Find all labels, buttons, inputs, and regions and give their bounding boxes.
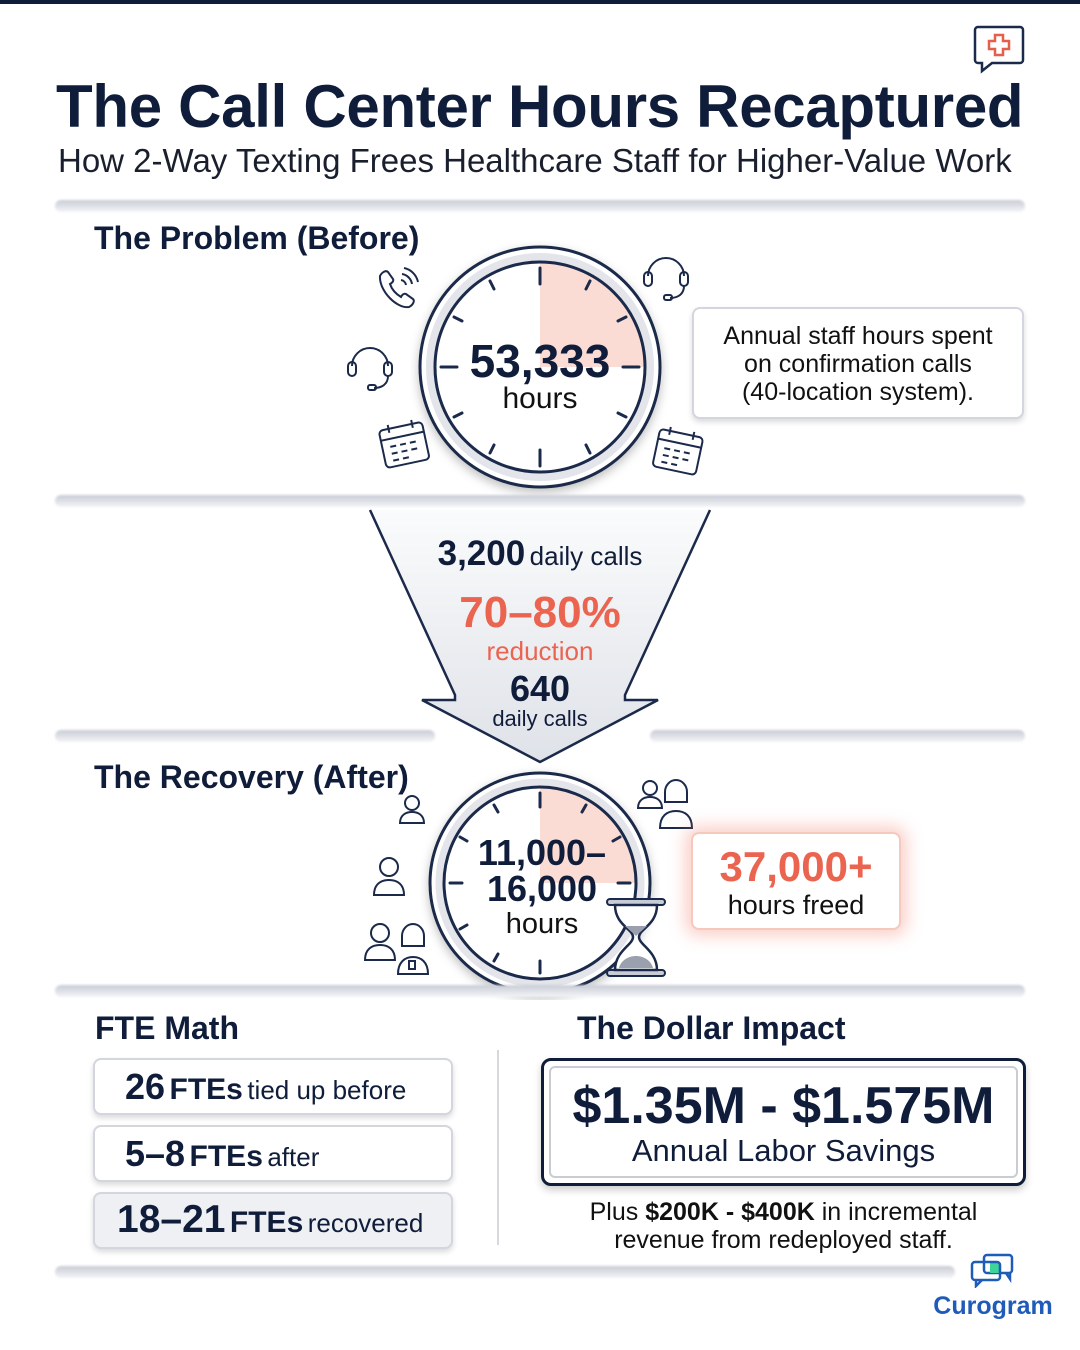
divider [497, 1050, 499, 1245]
clock: 53,333 hours: hours [502, 382, 578, 415]
icon: headset right [643, 257, 689, 301]
callout: 37,000+ hours freed: hours freed [728, 890, 864, 920]
text: incremental revenue [590, 1198, 977, 1254]
icon: calendar left [378, 420, 430, 468]
text: 640 daily calls: daily calls [492, 706, 588, 731]
text: 3,200 daily calls: 3,200 daily calls [438, 534, 642, 573]
text: 640 daily calls: 640 [510, 668, 570, 709]
clock: 53,333 hours: 53,333 [470, 335, 610, 387]
FTE row 2 [93, 1125, 453, 1182]
clock: 11,000-16,000 hours [423, 770, 657, 1000]
callout: 37,000+ hours freed: 37,000+ [720, 843, 872, 890]
clock: 11,000-16,000 hours: hours [506, 908, 578, 940]
savings box: Annual Labor Savings [632, 1133, 935, 1168]
clock: 11,000-16,000 hours: 16,000 [487, 868, 597, 909]
heading: FTE math: FTE Math [95, 1010, 239, 1046]
heading: dollar impact: The Dollar Impact [577, 1010, 846, 1046]
icon: headset left [347, 347, 393, 391]
FTE row 3 [93, 1192, 453, 1249]
heading: problem: The Problem (Before) [94, 220, 419, 256]
subtitle: How 2-Way Texting Frees Healthcare Staff for Higher-Value Work [58, 142, 1012, 179]
top border [0, 0, 1080, 4]
icon: phone [378, 267, 419, 308]
savings box: $1.35M - $1.575M [572, 1077, 995, 1135]
icon: chat plus [974, 26, 1024, 74]
arrow: funnel reduction [368, 510, 712, 764]
text: 640 daily calls [492, 668, 588, 731]
FTE row 2: 5–8 FTEs after [125, 1133, 319, 1174]
icons: people [364, 779, 693, 975]
callout: annual staff hours [692, 307, 1024, 419]
FTE row 1 [93, 1058, 453, 1115]
callout: 37,000+ hours freed [691, 832, 901, 930]
logo: Curogram: Curogram [933, 1292, 1053, 1320]
FTE row 3: 18–21 FTEs recovered [117, 1198, 423, 1241]
text: 70-80% reduction [459, 588, 621, 666]
callout: annual staff hours: (40-location system). [742, 378, 974, 406]
heading: recovery: The Recovery (After) [94, 759, 409, 795]
text: 70-80% reduction: 70–80% [459, 588, 621, 637]
title: The Call Center Hours Recaptured [56, 73, 1023, 140]
callout: annual staff hours: Annual staff hours spent [723, 322, 993, 350]
icon: hourglass [606, 898, 666, 977]
savings box [541, 1058, 1026, 1186]
icon: calendar right [652, 426, 704, 476]
callout: annual staff hours: on confirmation calls [744, 350, 972, 378]
clock: 11,000-16,000 hours: 11,000– [478, 832, 606, 873]
text: incremental revenue: revenue from redeployed staff. [614, 1226, 953, 1254]
text: 70-80% reduction: reduction [487, 636, 593, 666]
logo: Curogram [933, 1254, 1053, 1320]
FTE row 1: 26 FTEs tied up before [125, 1066, 406, 1107]
clock: 53,333 hours [413, 244, 667, 495]
text: incremental revenue: Plus $200K - $400K in incremental [590, 1198, 977, 1226]
